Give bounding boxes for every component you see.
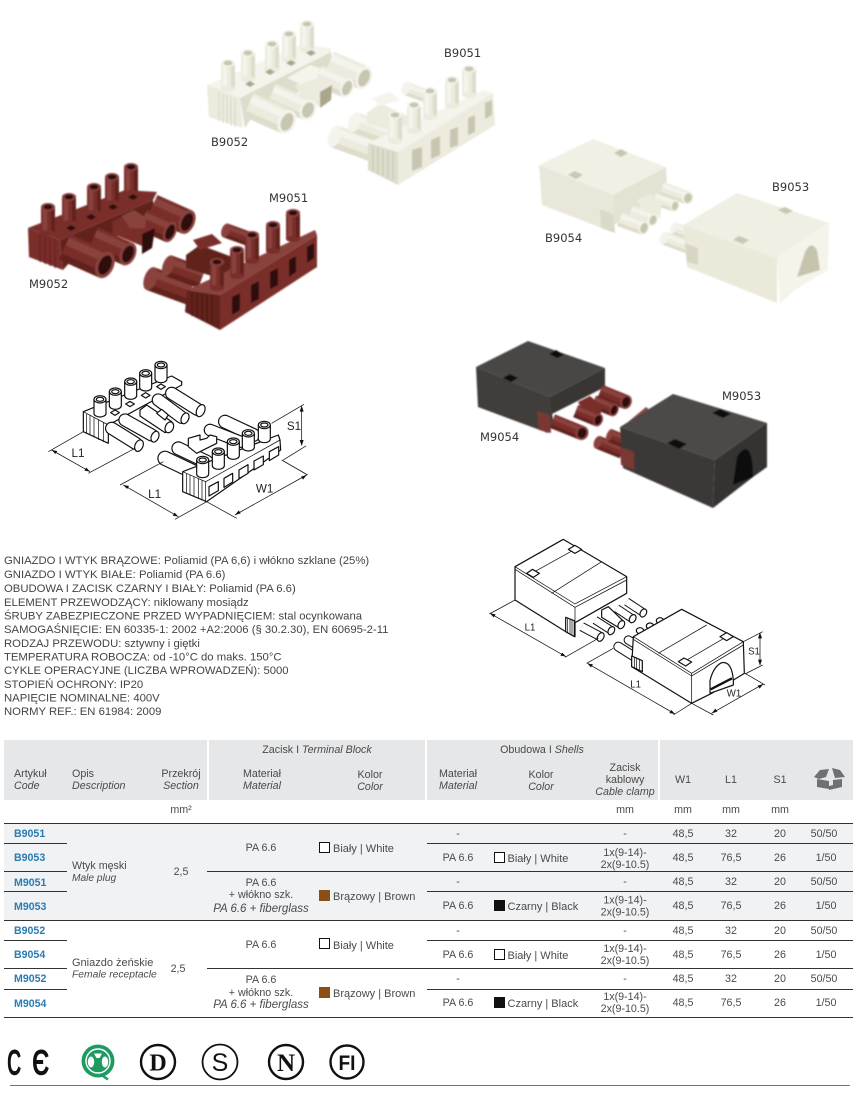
technical drawing: open connectors with dimensions: S1 xyxy=(287,420,301,433)
icon: CE mark xyxy=(7,1042,49,1084)
shell columns: - xyxy=(456,828,460,840)
dimension and packaging values: 48,5 xyxy=(673,997,693,1009)
table header: Color xyxy=(357,781,383,793)
dimension and packaging values: 50/50 xyxy=(811,828,837,840)
specification text block: GNIAZDO I WTYK BRĄZOWE: Poliamid (PA 6,6) i włókno szklane (25%) xyxy=(4,555,369,567)
icon: IMQ certification mark xyxy=(82,1044,114,1080)
terminal block material and colour: + włókno szk. xyxy=(229,987,293,999)
shell columns: 2x(9-10.5) xyxy=(601,906,649,918)
product labels on photos: M9051 xyxy=(269,191,308,205)
icon: FI certification mark: FI xyxy=(338,1052,356,1075)
photo: B9052 white plug connector xyxy=(207,20,376,137)
table header: Materiał xyxy=(243,768,282,780)
shell columns: Biały | White xyxy=(508,853,568,865)
technical drawing: shell connectors with dimensions: S1 xyxy=(748,647,760,658)
product labels on photos: M9054 xyxy=(480,430,519,444)
photo: B9053 white shell receptacle xyxy=(658,193,829,304)
table header xyxy=(4,740,853,800)
shell columns: - xyxy=(623,828,627,840)
table units row xyxy=(170,804,789,816)
descriptions and sections: Female receptacle xyxy=(72,970,157,980)
terminal block material and colour: PA 6.6 + fiberglass xyxy=(213,999,309,1011)
specification text block: RODZAJ PRZEWODU: sztywny i giętki xyxy=(4,638,200,650)
specification text block: NORMY REF.: EN 61984: 2009 xyxy=(4,706,161,718)
table header: Materiał xyxy=(439,768,478,780)
icon: D certification mark: D xyxy=(149,1050,167,1076)
dimension and packaging values: 76,5 xyxy=(721,900,741,912)
specification text block: GNIAZDO I WTYK BIAŁE: Poliamid (PA 6.6) xyxy=(4,569,226,581)
technical drawing: open connectors with dimensions: W1 xyxy=(256,482,273,495)
shell columns: 1x(9-14)- xyxy=(603,847,647,859)
photo: M9051 brown receptacle connector xyxy=(141,209,317,330)
icon: CE mark: Є xyxy=(32,1042,49,1083)
technical drawing: open connectors with dimensions xyxy=(48,361,308,519)
terminal block material and colour: PA 6.6 xyxy=(246,974,276,986)
specification text block: NAPIĘCIE NOMINALNE: 400V xyxy=(4,692,160,704)
table header: Przekrój xyxy=(161,768,201,780)
dimension and packaging values: 1/50 xyxy=(816,949,836,961)
technical drawing: shell connectors with dimensions: L1 xyxy=(630,679,641,690)
icon: S certification mark: S xyxy=(212,1049,228,1077)
table row shading and rules xyxy=(4,823,853,1018)
shell columns xyxy=(443,828,649,1015)
shell columns: PA 6.6 xyxy=(443,997,473,1009)
shell columns: 2x(9-10.5) xyxy=(601,955,649,967)
dimension and packaging values: 32 xyxy=(725,925,737,937)
dimension and packaging values: 76,5 xyxy=(721,949,741,961)
icon: N certification mark: N xyxy=(277,1050,295,1077)
table header: Kolor xyxy=(529,769,554,781)
specification text block: ŚRUBY ZABEZPIECZONE PRZED WYPADNIĘCIEM: stal ocynkowana xyxy=(4,610,363,622)
shell columns: - xyxy=(623,876,627,888)
dimension and packaging values: 20 xyxy=(774,925,786,937)
photo: M9052 brown plug connector xyxy=(28,163,199,281)
technical drawing: shell connectors with dimensions: W1 xyxy=(727,689,741,700)
shell columns: 1x(9-14)- xyxy=(603,991,647,1003)
table header: Artykuł xyxy=(14,768,47,780)
dimension and packaging values: 48,5 xyxy=(673,900,693,912)
dimension and packaging values: 20 xyxy=(774,973,786,985)
dimension and packaging values: 48,5 xyxy=(673,828,693,840)
product labels on photos: M9053 xyxy=(722,389,761,403)
dimension and packaging values: 32 xyxy=(725,828,737,840)
dimension and packaging values: 1/50 xyxy=(816,900,836,912)
technical drawing: shell connectors with dimensions: L1 xyxy=(525,623,535,634)
terminal block material and colour: PA 6.6 + fiberglass xyxy=(213,903,309,915)
article codes: B9054 xyxy=(14,949,45,961)
shell columns: Czarny | Black xyxy=(508,901,579,913)
shell columns: PA 6.6 xyxy=(443,852,473,864)
terminal block material and colour xyxy=(213,842,415,1011)
table header: L1 xyxy=(725,774,737,786)
product labels on photos xyxy=(29,46,809,444)
product labels on photos: B9054 xyxy=(545,231,582,245)
table units row: mm xyxy=(771,804,789,816)
descriptions and sections: Gniazdo żeńskie xyxy=(72,957,153,969)
table header: Obudowa I Shells xyxy=(500,744,585,756)
product labels on photos: M9052 xyxy=(29,277,68,291)
terminal block material and colour: PA 6.6 xyxy=(246,939,276,951)
shell columns: - xyxy=(456,876,460,888)
article codes: M9052 xyxy=(14,973,46,985)
icon: D certification mark xyxy=(141,1045,175,1079)
dimension and packaging values: 1/50 xyxy=(816,997,836,1009)
specification text block: STOPIEŃ OCHRONY: IP20 xyxy=(4,678,143,691)
dimension and packaging values: 48,5 xyxy=(673,973,693,985)
dimension and packaging values: 48,5 xyxy=(673,852,693,864)
dimension and packaging values: 26 xyxy=(774,900,786,912)
terminal block material and colour: Biały | White xyxy=(333,940,394,952)
shell columns: - xyxy=(623,973,627,985)
terminal block material and colour: + włókno szk. xyxy=(229,889,293,901)
product labels on photos: B9053 xyxy=(772,180,809,194)
dimension and packaging values: 20 xyxy=(774,828,786,840)
table units row: mm xyxy=(616,804,634,816)
shell columns: - xyxy=(456,925,460,937)
table header: Zacisk xyxy=(610,762,641,774)
shell columns: 2x(9-10.5) xyxy=(601,859,649,871)
product labels on photos: B9052 xyxy=(211,135,248,149)
specification text block: SAMOGAŚNIĘCIE: EN 60335-1: 2002 +A2:2006 (§ 30.2.30), EN 60695-2-11 xyxy=(4,623,388,636)
shell columns: 1x(9-14)- xyxy=(603,943,647,955)
dimension and packaging values: 32 xyxy=(725,973,737,985)
dimension and packaging values: 26 xyxy=(774,852,786,864)
technical drawing: open connectors with dimensions: L1 xyxy=(148,488,161,501)
dimension and packaging values: 50/50 xyxy=(811,973,837,985)
specification table xyxy=(4,740,853,1018)
shell columns: - xyxy=(623,925,627,937)
article codes: M9054 xyxy=(14,998,46,1010)
table header: Zacisk I Terminal Block xyxy=(262,744,372,756)
technical drawing: open connectors with dimensions: L1 xyxy=(72,447,84,460)
table header: kablowy xyxy=(606,774,645,786)
icon: packaging box xyxy=(814,768,845,790)
descriptions and sections: 2,5 xyxy=(171,963,185,975)
specification text block: OBUDOWA I ZACISK CZARNY I BIAŁY: Poliamid (PA 6.6) xyxy=(4,583,296,595)
dimension and packaging values: 48,5 xyxy=(673,925,693,937)
icon: N certification mark xyxy=(269,1045,303,1079)
dimension and packaging values: 48,5 xyxy=(673,949,693,961)
shell columns: Czarny | Black xyxy=(508,998,579,1010)
shell columns: Biały | White xyxy=(508,950,568,962)
table header: Material xyxy=(243,780,282,792)
dimension and packaging values: 26 xyxy=(774,997,786,1009)
terminal block material and colour: Biały | White xyxy=(333,843,394,855)
article codes: B9052 xyxy=(14,925,45,937)
table units row: mm² xyxy=(170,804,192,816)
dimension and packaging values: 48,5 xyxy=(673,876,693,888)
terminal block material and colour: Brązowy | Brown xyxy=(333,988,415,1000)
dimension and packaging values: 20 xyxy=(774,876,786,888)
table header: W1 xyxy=(675,774,691,786)
shell columns: 1x(9-14)- xyxy=(603,894,647,906)
photo: M9054 black shell plug xyxy=(476,341,634,442)
table header: Description xyxy=(72,780,126,792)
product labels on photos: B9051 xyxy=(444,46,481,60)
icon: CE mark: C xyxy=(7,1044,21,1084)
shell columns: PA 6.6 xyxy=(443,949,473,961)
descriptions and sections: Wtyk męski xyxy=(72,860,127,872)
article codes: B9051 xyxy=(14,828,45,840)
dimension and packaging values: 26 xyxy=(774,949,786,961)
photo: B9051 white receptacle connector xyxy=(325,65,495,185)
table units row: mm xyxy=(722,804,740,816)
table units row: mm xyxy=(674,804,692,816)
descriptions and sections: Male plug xyxy=(72,873,117,884)
table header: Code xyxy=(14,780,40,792)
terminal block material and colour: PA 6.6 xyxy=(246,842,276,854)
descriptions and sections xyxy=(72,860,188,980)
specification text block xyxy=(4,555,388,718)
table header: Color xyxy=(528,781,554,793)
dimension and packaging values xyxy=(673,828,837,1009)
dimension and packaging values: 76,5 xyxy=(721,997,741,1009)
terminal block material and colour: PA 6.6 xyxy=(246,877,276,889)
technical drawing: shell connectors with dimensions xyxy=(489,539,765,715)
article codes: B9053 xyxy=(14,852,45,864)
shell columns: PA 6.6 xyxy=(443,900,473,912)
specification text block: CYKLE OPERACYJNE (LICZBA WPROWADZEŃ): 5000 xyxy=(4,664,289,677)
table header: Opis xyxy=(72,768,94,780)
shell columns: - xyxy=(456,973,460,985)
icon: S certification mark xyxy=(202,1044,238,1080)
photo: B9054 white shell plug xyxy=(539,139,696,237)
icon: FI certification mark xyxy=(330,1046,364,1078)
table header: Kolor xyxy=(358,769,383,781)
table header: Material xyxy=(439,780,478,792)
table header: S1 xyxy=(773,774,787,786)
dimension and packaging values: 76,5 xyxy=(721,852,741,864)
terminal block material and colour: Brązowy | Brown xyxy=(333,891,415,903)
dimension and packaging values: 50/50 xyxy=(811,876,837,888)
shell columns: 2x(9-10.5) xyxy=(601,1003,649,1015)
article codes: M9051 xyxy=(14,877,46,889)
dimension and packaging values: 1/50 xyxy=(816,852,836,864)
specification text block: ELEMENT PRZEWODZĄCY: niklowany mosiądz xyxy=(4,597,249,609)
photo: M9053 black shell receptacle xyxy=(592,394,767,508)
descriptions and sections: 2,5 xyxy=(174,866,188,878)
table header: Section xyxy=(163,780,199,792)
article codes xyxy=(14,828,46,1010)
article codes: M9053 xyxy=(14,901,46,913)
dimension and packaging values: 50/50 xyxy=(811,925,837,937)
dimension and packaging values: 32 xyxy=(725,876,737,888)
specification text block: TEMPERATURA ROBOCZA: od -10°C do maks. 150°C xyxy=(4,652,282,664)
table header: Cable clamp xyxy=(595,786,655,798)
